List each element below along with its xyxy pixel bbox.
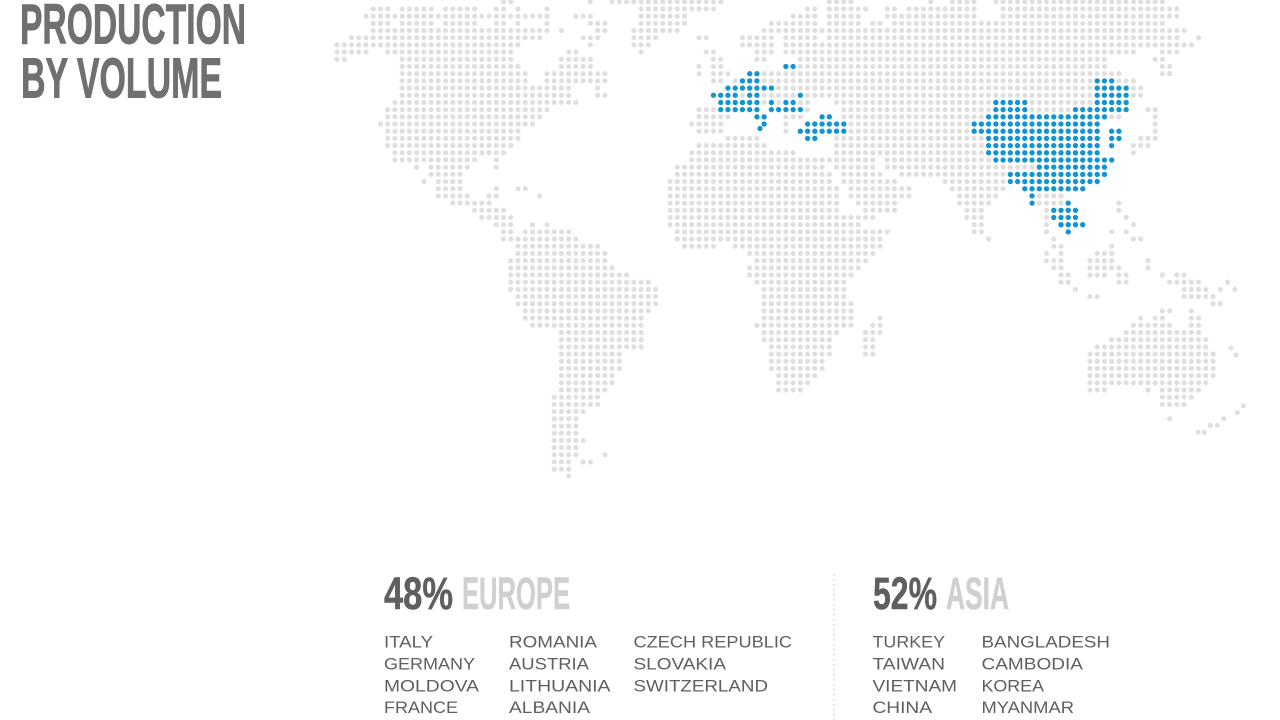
list: Asia countries: VIETNAM (872, 676, 957, 696)
list: Europe countries (384, 632, 792, 717)
heading: 48% Europe (384, 568, 570, 619)
list: Asia countries: BANGLADESH (982, 632, 1110, 652)
map: outlying islands (1196, 346, 1246, 435)
list: Europe countries: ITALY (384, 632, 433, 652)
list: Asia countries: CAMBODIA (982, 654, 1084, 674)
heading: 48% Europe: EUROPE (462, 568, 570, 619)
list: Asia countries: TURKEY (872, 632, 945, 652)
list: Europe countries: ROMANIA (509, 632, 598, 652)
list: Asia countries: CHINA (872, 698, 933, 717)
map: grey land dots (337, 2, 1235, 476)
list: Europe countries: CZECH REPUBLIC (634, 632, 792, 652)
heading: 52% Asia (873, 568, 1009, 619)
panel: Asia (872, 568, 1110, 717)
list: Asia countries (872, 632, 1110, 717)
list: Asia countries: MYANMAR (982, 698, 1074, 717)
title (20, 0, 246, 110)
list: Europe countries: SLOVAKIA (634, 654, 727, 674)
list: Europe countries: LITHUANIA (509, 676, 611, 696)
map: Europe production dots (713, 67, 844, 138)
dotted world map (337, 2, 1246, 476)
list: Asia countries: KOREA (982, 676, 1045, 696)
title: BY VOLUME (21, 46, 222, 110)
list: Europe countries: MOLDOVA (384, 676, 480, 696)
heading: 52% Asia: 52% (873, 568, 937, 619)
list: Europe countries: ALBANIA (509, 698, 591, 717)
list: Europe countries: GERMANY (384, 654, 475, 674)
heading: 52% Asia: ASIA (946, 568, 1009, 619)
list: Europe countries: AUSTRIA (509, 654, 590, 674)
list: Asia countries: TAIWAN (872, 654, 945, 674)
list: Europe countries: SWITZERLAND (634, 676, 768, 696)
list: Europe countries: FRANCE (384, 698, 458, 717)
map: Asia production dots (974, 81, 1126, 232)
heading: 48% Europe: 48% (384, 568, 453, 619)
panel: Europe (384, 568, 792, 717)
